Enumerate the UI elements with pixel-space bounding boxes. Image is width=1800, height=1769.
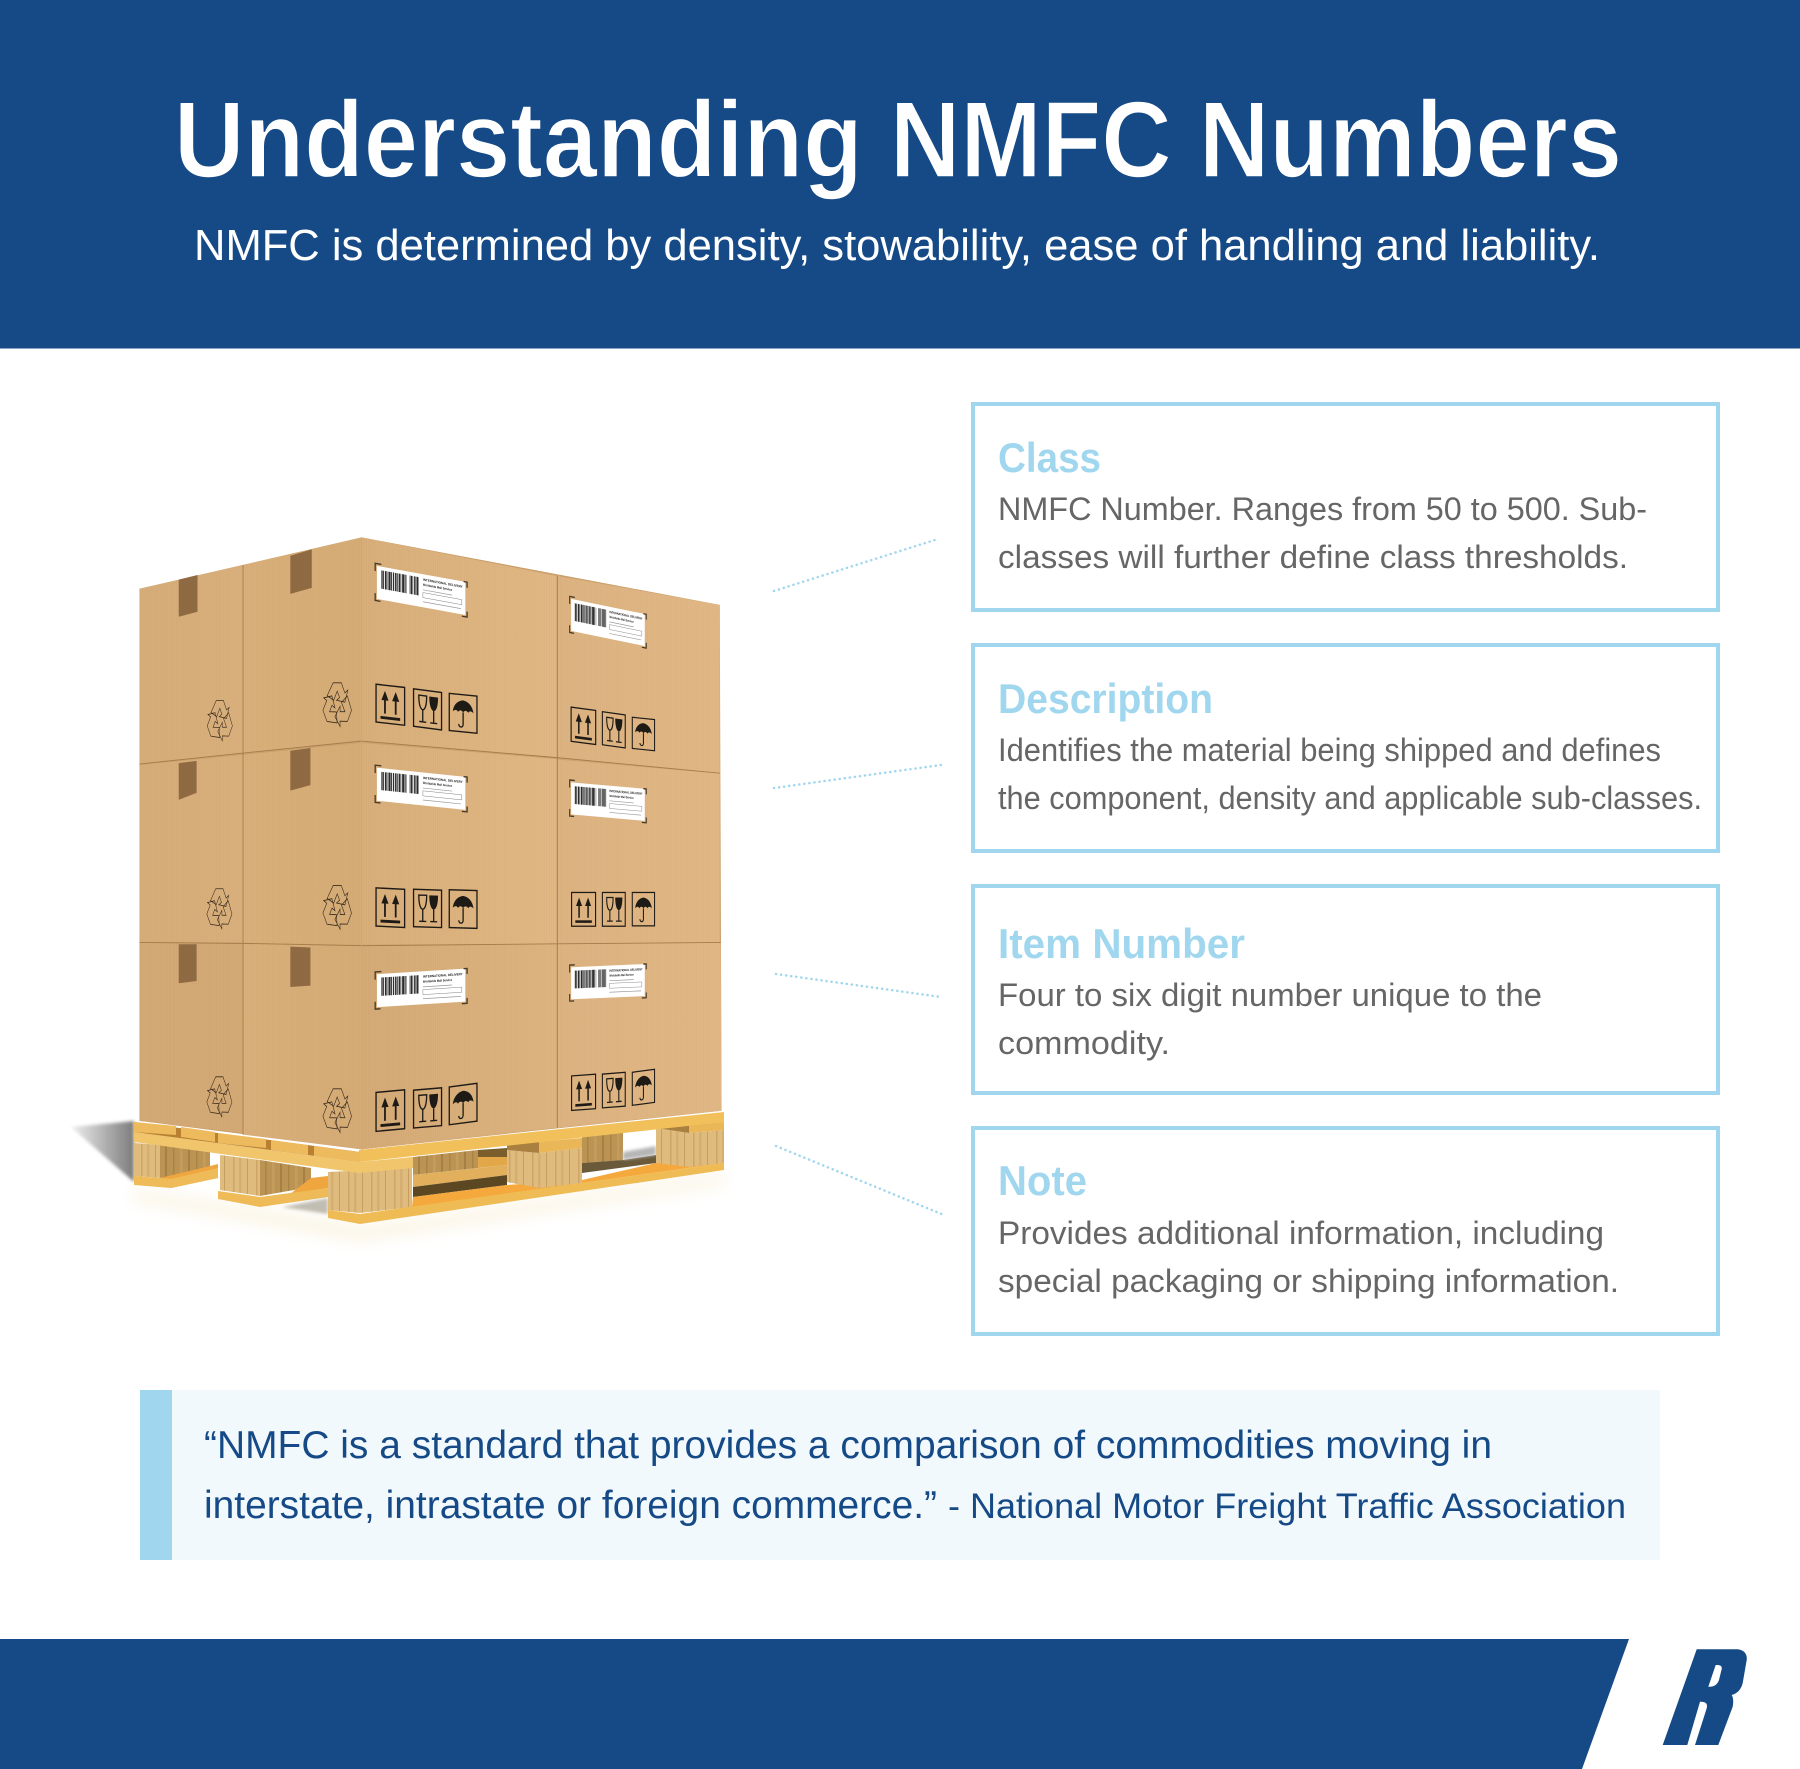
text: class description: NMFC Number. Ranges from 50 to 500. Sub- — [998, 491, 1647, 527]
shipping label: bottom side: INTERNATIONAL DELIVERY — [609, 967, 643, 973]
quote text: “NMFC is a standard that provides a comparison of commodities moving in — [204, 1424, 1492, 1467]
accent bar — [140, 1390, 172, 1560]
ground shadow — [71, 1121, 134, 1182]
middle tier boxes — [139, 743, 720, 945]
shipping label: bottom side: Worldwide Mail Service — [609, 972, 634, 978]
logo: R — [1663, 1649, 1747, 1745]
quote text: interstate, intrastate or foreign commerce.” — [204, 1484, 937, 1527]
heading: class: Class — [998, 434, 1101, 481]
bottom tier boxes — [139, 942, 722, 1149]
dotted connector: note — [776, 1146, 944, 1215]
text: item number details: Four to six digit number unique to the — [998, 977, 1542, 1013]
wooden pallet — [134, 1112, 724, 1224]
text: class description — [998, 491, 1647, 575]
shipping label: top side — [570, 596, 646, 648]
text: note details: Provides additional information, including — [998, 1215, 1604, 1251]
corrugation texture and box seams — [139, 537, 722, 1149]
shipping label: top side: Worldwide Mail Service — [609, 615, 634, 624]
dotted connector: class — [774, 539, 938, 591]
shipping label: top front: Worldwide Mail Service — [423, 583, 452, 592]
shipping label: middle side: INTERNATIONAL DELIVERY — [609, 789, 643, 796]
subtitle: NMFC is determined by density, stowability, ease of handling and liability. — [194, 221, 1600, 270]
text: class description: classes will further define class thresholds. — [998, 539, 1628, 575]
shipping label: middle front: Worldwide Mail Service — [423, 781, 452, 788]
handling icons: bottom side — [572, 1069, 655, 1110]
header banner — [0, 0, 1800, 348]
text: description details — [998, 732, 1702, 816]
heading: description: Description — [998, 675, 1213, 722]
shipping label: middle front: INTERNATIONAL DELIVERY — [423, 776, 464, 784]
shipping label: middle side — [570, 780, 646, 823]
handling icons: top front — [376, 684, 477, 733]
pallet with stacked cardboard boxes — [71, 537, 724, 1240]
title: Understanding NMFC Numbers — [174, 79, 1622, 201]
text: description details: Identifies the material being shipped and defines — [998, 732, 1661, 768]
shipping label: top front: INTERNATIONAL DELIVERY — [423, 578, 464, 589]
text: item number details — [998, 977, 1542, 1061]
text: note details — [998, 1215, 1619, 1299]
dotted connector: item number — [776, 974, 941, 997]
shipping label: middle front — [375, 765, 467, 812]
handling icons: middle front — [376, 888, 477, 928]
handling icons: bottom front — [376, 1083, 477, 1131]
panel: class — [973, 404, 1718, 610]
footer bar — [0, 1639, 1629, 1769]
heading: note: Note — [998, 1157, 1087, 1204]
recycling symbols on box sides — [204, 683, 354, 1136]
box stack — [139, 537, 722, 1149]
heading: item number: Item Number — [998, 920, 1245, 967]
shipping label: middle side: Worldwide Mail Service — [609, 794, 634, 800]
shipping label: bottom front: INTERNATIONAL DELIVERY — [423, 972, 464, 979]
dotted connector: description — [774, 765, 941, 788]
quote text — [204, 1424, 1626, 1527]
top tier boxes — [139, 537, 720, 773]
callout: quote panel — [140, 1390, 1660, 1560]
shipping label: top side: INTERNATIONAL DELIVERY — [609, 610, 643, 621]
handling icons: middle side — [572, 892, 655, 926]
handling icons: top side — [571, 707, 655, 751]
text: item number details: commodity. — [998, 1025, 1170, 1061]
shipping label: bottom front — [375, 966, 467, 1009]
shipping label: bottom side — [570, 962, 646, 1001]
quote text: - National Motor Freight Traffic Association — [948, 1487, 1626, 1526]
text: description details: the component, density and applicable sub-classes. — [998, 780, 1702, 816]
panel: item number — [973, 886, 1718, 1093]
shipping label: bottom front: Worldwide Mail Service — [423, 978, 452, 984]
stack base shape — [139, 537, 722, 1149]
text: note details: special packaging or shipping information. — [998, 1263, 1619, 1299]
panel: description — [973, 645, 1718, 851]
shipping label: top front — [375, 563, 467, 617]
panel: note — [973, 1128, 1718, 1334]
